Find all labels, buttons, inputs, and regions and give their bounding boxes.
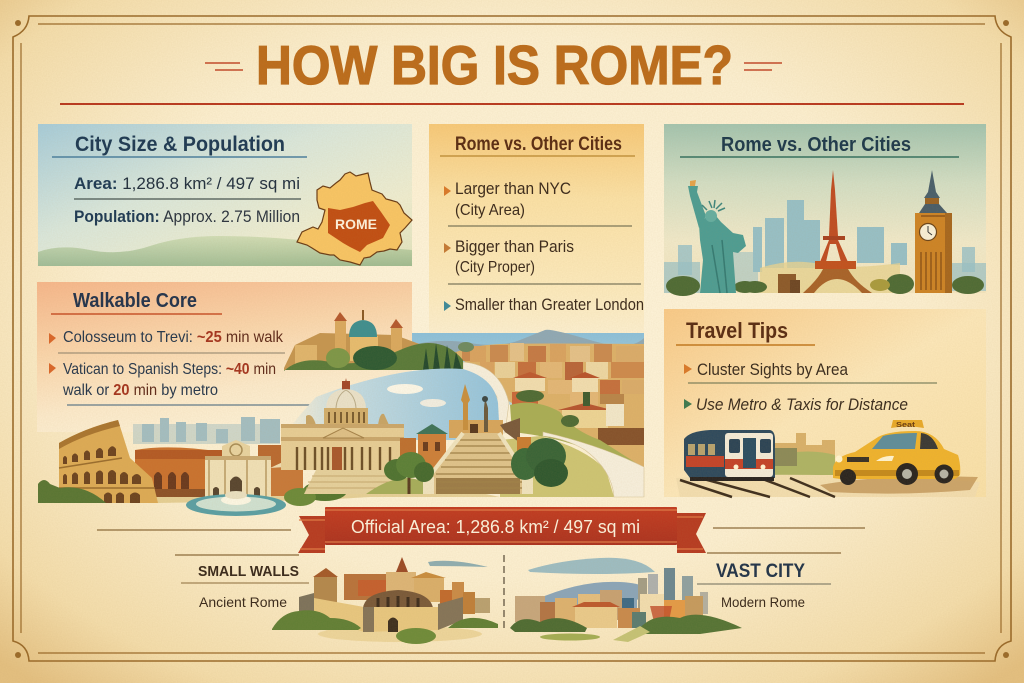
icon: st peter's basilica <box>281 378 406 494</box>
road <box>676 475 980 497</box>
icon: modern rome city <box>510 558 742 642</box>
panel: rome vs other cities skyline <box>664 124 986 296</box>
rotunda <box>363 590 433 608</box>
distant buildings <box>775 433 835 475</box>
walk: vatican to spanish steps: walk or 20 min by metro <box>62 382 218 399</box>
tip: cluster sights: Cluster Sights by Area <box>697 360 848 379</box>
small walls label: Ancient Rome <box>199 594 287 610</box>
illustration: hilltop church <box>284 310 463 371</box>
illustration: rome landmarks scene <box>38 369 568 516</box>
item: larger than NYC <box>444 179 571 219</box>
banner: official area: Official Area: 1,286.8 km² / 497 sq mi <box>351 517 640 537</box>
heading: Rome vs. Other Cities <box>455 134 622 155</box>
population stat: Population: Approx. 2.75 Million <box>74 207 300 226</box>
map of Rome: ROME <box>335 216 377 232</box>
small brick building <box>778 274 800 293</box>
houses <box>462 343 644 445</box>
bushes <box>666 274 984 296</box>
banner: official area <box>298 507 706 553</box>
skyline <box>664 200 986 293</box>
road <box>463 362 644 497</box>
panel: rome vs other cities list <box>429 124 644 336</box>
trees <box>384 438 568 494</box>
icon: statue of liberty <box>688 180 746 293</box>
heading: City Size & Population <box>75 133 285 156</box>
item: larger than NYC: Larger than NYC <box>455 179 571 198</box>
item: bigger than Paris: Bigger than Paris <box>455 237 574 256</box>
icon: train <box>684 430 775 481</box>
grey wall <box>299 593 314 620</box>
icon: eiffel tower <box>803 170 872 293</box>
ribbon side rules <box>97 528 865 555</box>
green behind fountain <box>303 481 347 501</box>
tall column and statue <box>461 384 488 432</box>
heading: Travel Tips <box>686 318 788 343</box>
small walls label <box>181 563 309 610</box>
icon: spanish steps <box>423 418 533 494</box>
tracks <box>680 478 835 497</box>
ground <box>60 480 500 503</box>
green left <box>38 480 106 503</box>
area stat: Area: 1,286.8 km² / 497 sq mi <box>74 174 300 193</box>
grass near stairs <box>366 478 424 494</box>
heading: Rome vs. Other Cities <box>721 134 911 156</box>
small walls label: SMALL WALLS <box>198 563 299 580</box>
left tower <box>314 577 337 605</box>
walk: colosseum to trevi: Colosseum to Trevi: ~25 min walk <box>63 329 284 346</box>
item: smaller than Greater London: Smaller than Greater London <box>455 295 644 314</box>
vast city label: Modern Rome <box>721 594 805 610</box>
sky <box>280 369 500 440</box>
walk: vatican to spanish steps: Vatican to Spanish Steps: ~40 min <box>63 361 276 378</box>
vast city label: VAST CITY <box>716 561 805 582</box>
vast city label <box>697 561 831 610</box>
city wall <box>314 597 463 632</box>
icon: ancient walled city <box>272 557 498 644</box>
icon: big ben <box>915 170 952 293</box>
walk: vatican to spanish steps <box>49 361 276 399</box>
bushes <box>272 610 361 630</box>
blue skyline <box>133 417 280 444</box>
heading: Walkable Core <box>73 290 197 312</box>
panel: travel tips <box>664 309 986 497</box>
back buildings <box>344 557 490 614</box>
item: bigger than Paris <box>444 237 574 276</box>
icon: taxi <box>833 420 960 485</box>
icon: taxi: Seat <box>896 422 916 429</box>
icon: colosseum <box>59 420 158 503</box>
item: larger than NYC: (City Area) <box>455 202 525 219</box>
tip: metro and taxis: Use Metro & Taxis for Distance <box>696 395 908 414</box>
second arena <box>135 447 222 497</box>
panel: city size and population <box>38 124 412 266</box>
hills <box>38 236 412 266</box>
icon: fountain basin <box>186 491 286 516</box>
item: bigger than Paris: (City Proper) <box>455 259 535 276</box>
icon: trevi fountain arch <box>205 440 271 498</box>
title rule <box>60 103 964 105</box>
map of Rome <box>297 172 412 265</box>
illustration: town panorama <box>412 330 644 480</box>
divider <box>503 555 505 632</box>
mid buildings <box>400 420 503 474</box>
panel: walkable core <box>37 282 412 432</box>
green field <box>500 436 614 497</box>
orange buildings <box>258 445 303 496</box>
green slopes <box>510 403 644 480</box>
title: HOW BIG IS ROME? <box>256 34 733 96</box>
